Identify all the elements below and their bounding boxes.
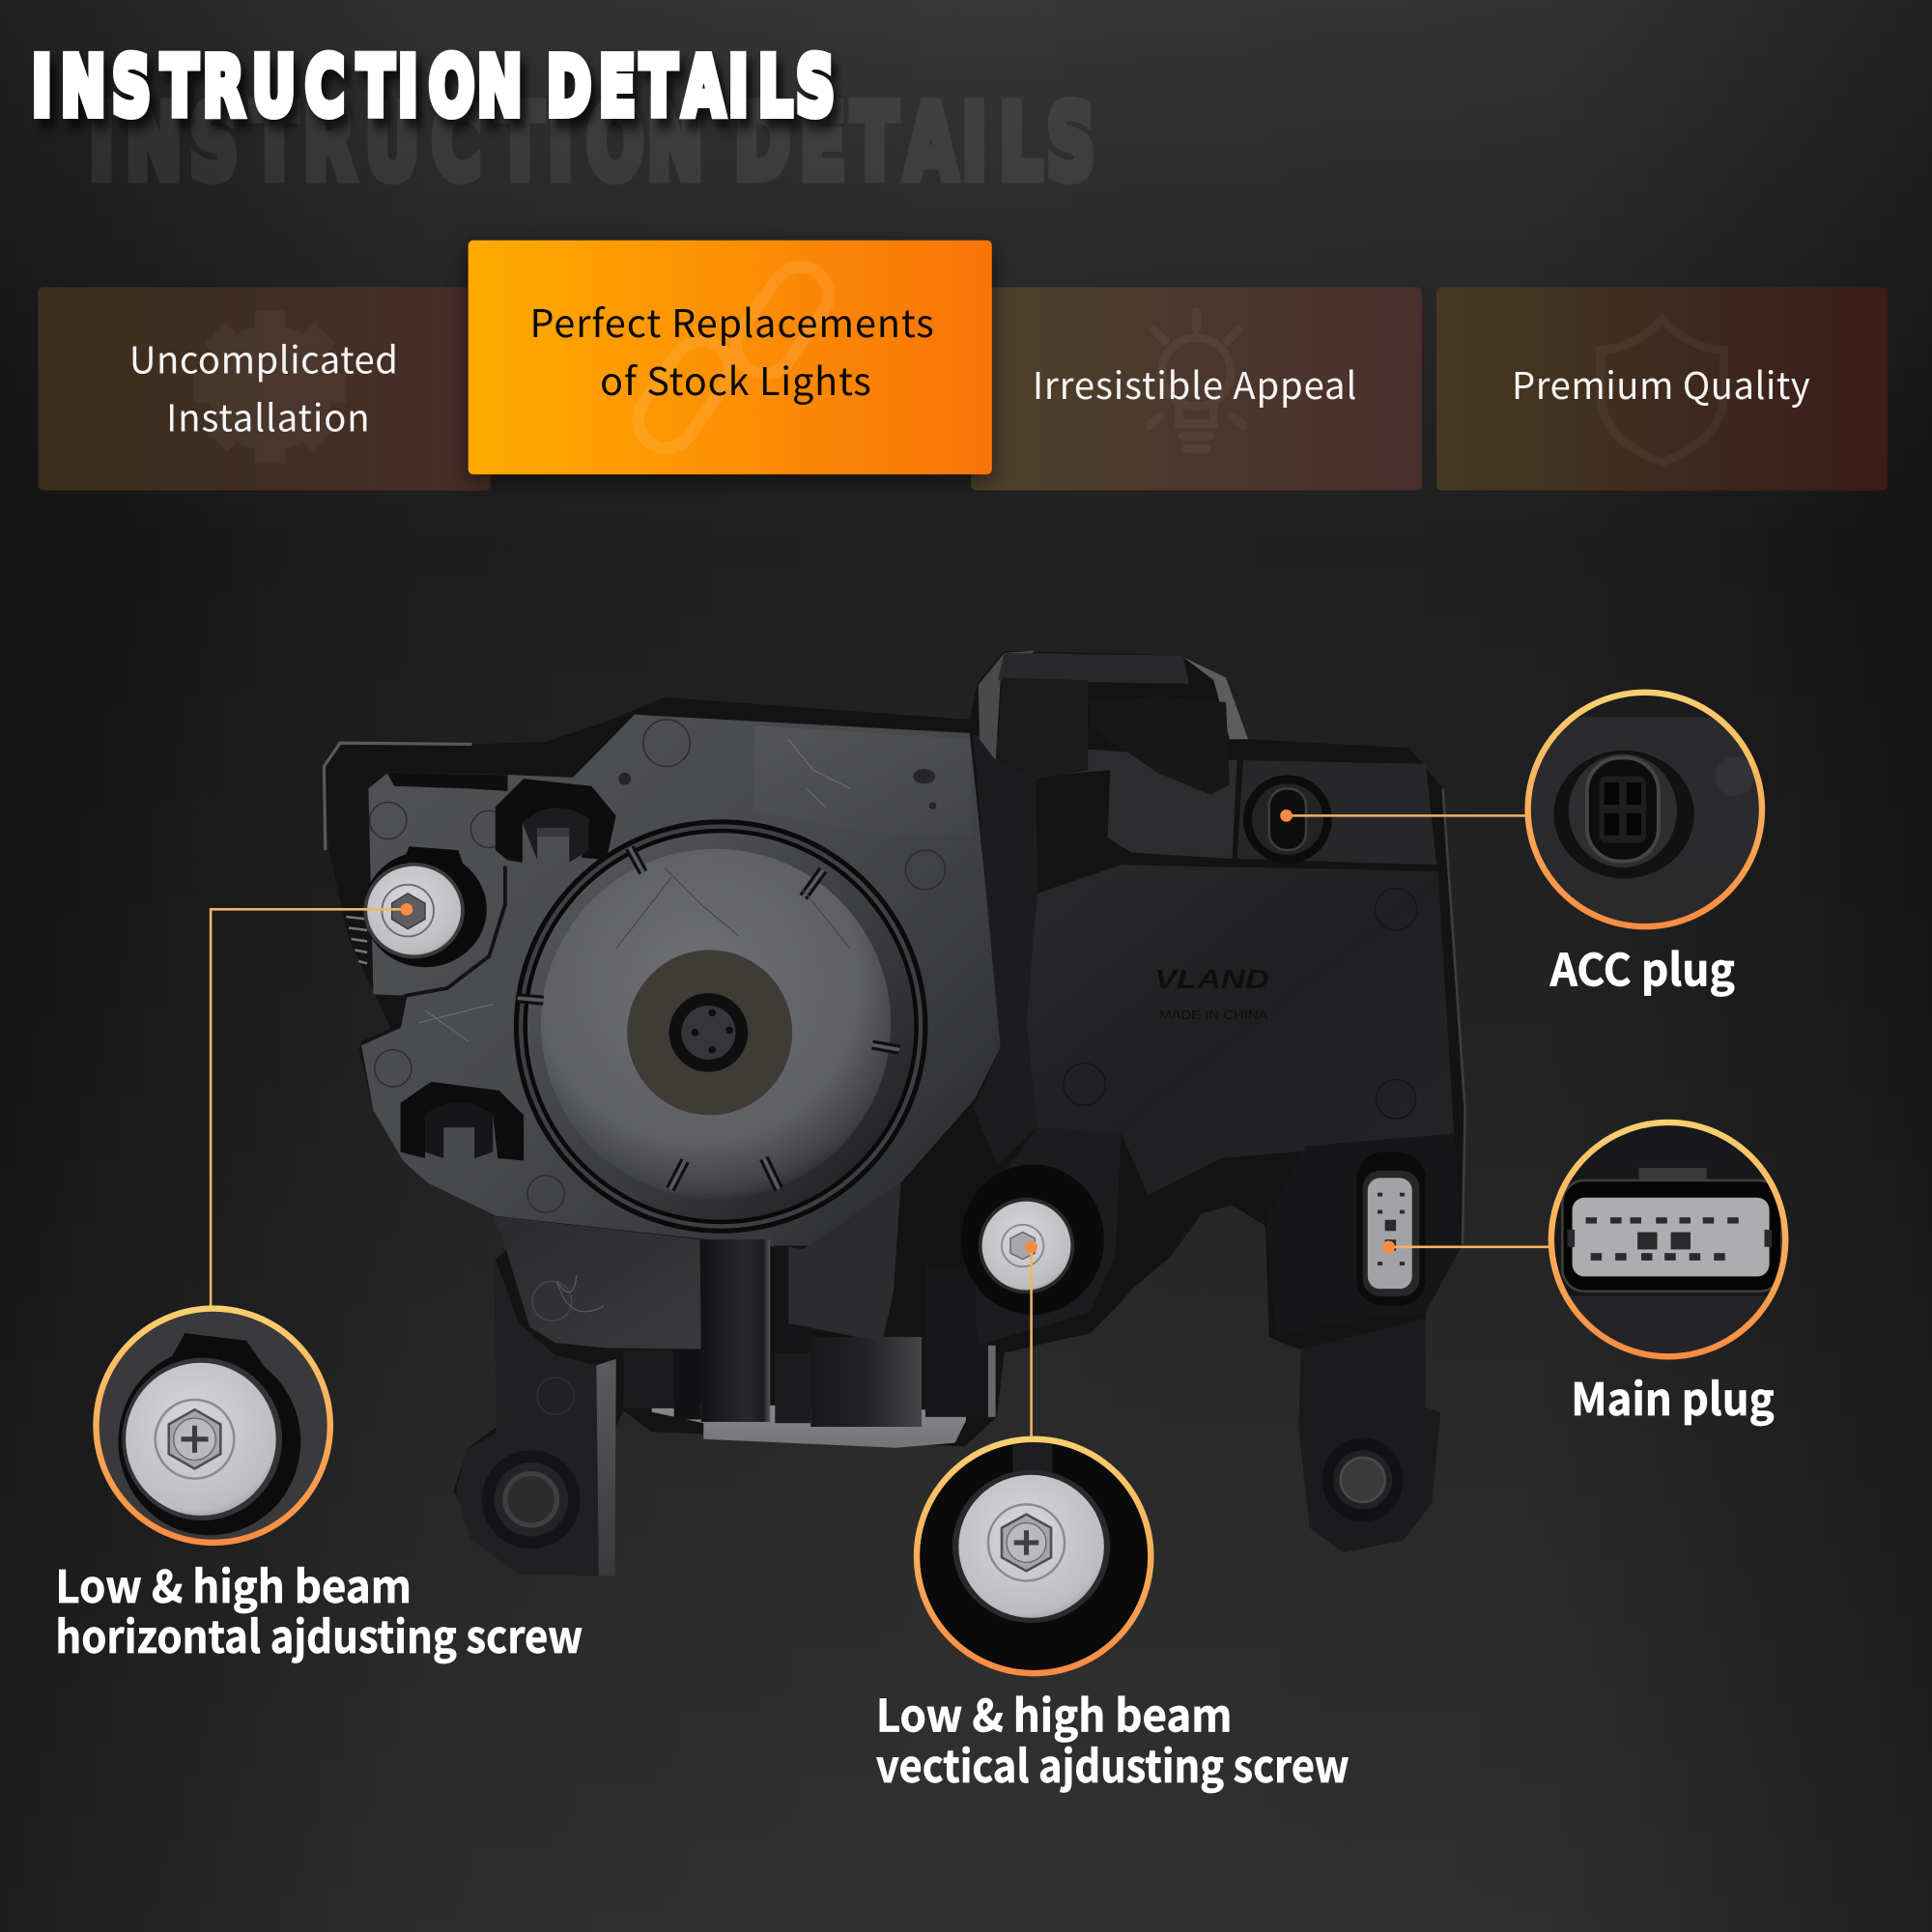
label: main plug: Main plug [1571, 1365, 1775, 1429]
icon: light bulb [1150, 312, 1243, 448]
top tab right [1091, 696, 1230, 795]
louver vents [346, 917, 367, 963]
text: perfect replacements: Perfect Replacements [529, 294, 934, 349]
lower right cowl [974, 1127, 1122, 1346]
lower connector block [623, 1239, 996, 1448]
label: acc plug: ACC plug [1549, 935, 1735, 999]
panel: perfect replacements (highlighted) [469, 241, 992, 480]
lower plate [494, 1216, 701, 1350]
title: INSTRUCTION DETAILS [32, 40, 835, 134]
headlamp rear view [324, 650, 1465, 1576]
text: of stock lights: of Stock Lights [600, 352, 871, 407]
right rib column [974, 734, 1037, 1164]
panel: premium quality [1436, 287, 1888, 491]
disk scratches [616, 868, 850, 949]
text: uncomplicated: Uncomplicated [129, 331, 398, 384]
text: installation: Installation [166, 389, 370, 442]
center dark seal [627, 950, 792, 1115]
text: irresistible appeal: Irresistible Appeal [1033, 357, 1356, 411]
icon: chain link [627, 256, 839, 459]
title: INSTRUCTION DETAILS [38, 49, 840, 144]
label: horizontal screw: horizontal ajdusting screw [55, 1603, 582, 1666]
screw: horizontal adjuster [363, 846, 487, 967]
acc socket [1243, 775, 1332, 864]
retaining clip bar [387, 773, 508, 791]
acc mounting panel [1237, 760, 1436, 865]
left frame rim [324, 743, 472, 850]
raised top block [753, 725, 972, 837]
label: vertical screw [876, 1682, 1350, 1796]
main left plate [361, 715, 1001, 1342]
text: premium quality: Premium Quality [1512, 357, 1810, 411]
top strip right [1182, 657, 1248, 739]
housing silhouette [324, 650, 1465, 1575]
callout: main plug zoom [1550, 1119, 1790, 1364]
main plug socket [1356, 1152, 1426, 1306]
bulb socket: top [496, 779, 616, 863]
ghost title behind heading: INSTRUCTION DETAILS [89, 83, 1095, 202]
panel: uncomplicated installation [39, 287, 491, 491]
callout: vertical screw zoom [912, 1435, 1155, 1677]
top dark strip [998, 653, 1189, 684]
panel: irresistible appeal [971, 287, 1422, 491]
hub [669, 993, 748, 1072]
marker dots [401, 810, 1395, 1253]
lamp cap [514, 819, 927, 1234]
label: horizontal screw [55, 1552, 582, 1666]
large rear panel [1026, 865, 1454, 1195]
top tab left [997, 678, 1088, 779]
panel ejector marks [1064, 889, 1417, 1119]
logo stamp [1154, 964, 1269, 1022]
middle raised block [1037, 746, 1237, 859]
screw: vertical adjuster [961, 1164, 1104, 1315]
logo stamp: MADE IN CHINA [1159, 1008, 1268, 1022]
label: horizontal screw: Low & high beam [55, 1552, 412, 1616]
left mounting bracket [456, 1256, 616, 1576]
housing rim highlight [1443, 788, 1465, 1244]
logo stamp: VLAND [1154, 964, 1269, 994]
label: vertical screw: vectical ajdusting screw [876, 1732, 1350, 1796]
ejector marks [370, 720, 949, 1212]
connector lines [211, 815, 1550, 1438]
icon: gear [193, 310, 346, 464]
label: vertical screw: Low & high beam [876, 1682, 1233, 1746]
icon: shield [1601, 319, 1723, 462]
callout: acc plug zoom [1525, 690, 1766, 933]
cap locking ribs [518, 848, 899, 1189]
top strip left [979, 650, 1035, 760]
plug mount block [1265, 1133, 1463, 1337]
scratches [419, 739, 850, 1041]
oil stains [618, 769, 936, 810]
right mounting bracket [1298, 1319, 1440, 1552]
compartment outline [361, 867, 505, 1043]
plate lower right corner [788, 1182, 900, 1342]
callout: horizontal screw zoom [86, 1306, 340, 1548]
bulb socket: bottom [401, 1082, 524, 1161]
